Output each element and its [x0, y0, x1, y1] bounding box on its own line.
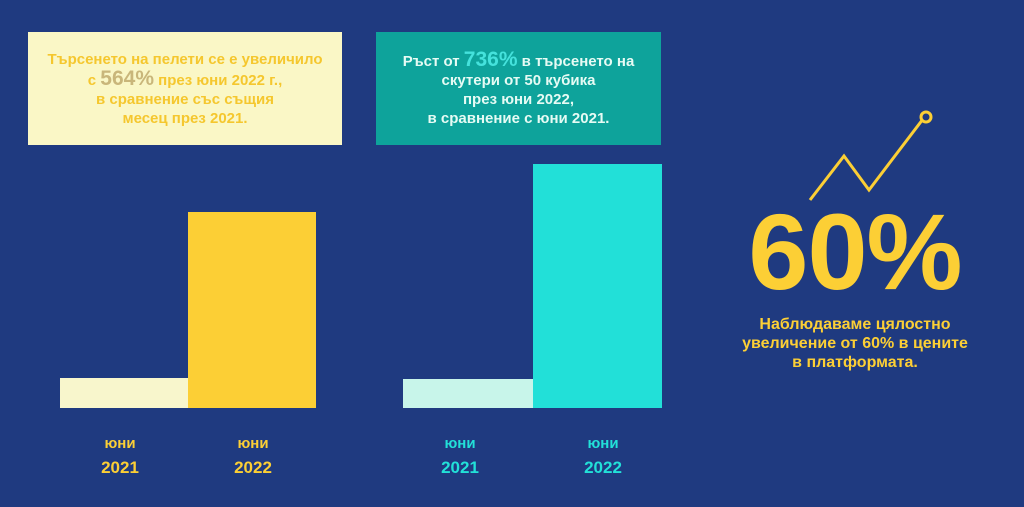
label: scooters 2022: юни — [587, 435, 619, 452]
callout: pellets: месец през 2021. — [122, 110, 248, 126]
callout: pellets: с 564% през юни 2022 г., — [88, 66, 282, 90]
label: scooters 2021 — [441, 435, 479, 477]
icon: trend line — [808, 110, 932, 201]
bar: pellets 2021 — [60, 378, 188, 408]
callout: pellets: в сравнение със същия — [96, 90, 274, 108]
callout: scooters — [376, 32, 661, 145]
bar: scooters 2021 — [403, 379, 533, 408]
label: scooters 2022: 2022 — [584, 458, 622, 477]
big stat 60%: 60% — [748, 191, 962, 312]
callout: scooters: в сравнение с юни 2021. — [428, 110, 609, 126]
bar: pellets 2022 — [188, 212, 316, 408]
description text — [742, 316, 968, 371]
description text: Наблюдаваме цялостно — [759, 316, 951, 333]
label: pellets 2022: юни — [237, 435, 269, 452]
callout: scooters: през юни 2022, — [463, 90, 574, 108]
label: scooters 2021: юни — [444, 435, 476, 452]
bar chart: scooters — [403, 164, 662, 408]
label: pellets 2022: 2022 — [234, 458, 272, 477]
label: pellets 2021 — [101, 435, 139, 477]
label: pellets 2022 — [234, 435, 272, 477]
label: scooters 2022 — [584, 435, 622, 477]
callout: pellets: Търсенето на пелети се е увеличило — [47, 50, 323, 68]
bar chart: pellets — [60, 212, 316, 408]
bar: scooters 2022 — [533, 164, 662, 408]
label: pellets 2021: юни — [104, 435, 136, 452]
callout: pellets — [28, 32, 342, 145]
description text: в платформата. — [792, 354, 918, 371]
label: scooters 2021: 2021 — [441, 458, 479, 477]
label: pellets 2021: 2021 — [101, 458, 139, 477]
callout: scooters: скутери от 50 кубика — [442, 72, 595, 88]
callout: scooters: Ръст от 736% в търсенето на — [403, 48, 634, 70]
description text: увеличение от 60% в цените — [742, 335, 968, 352]
